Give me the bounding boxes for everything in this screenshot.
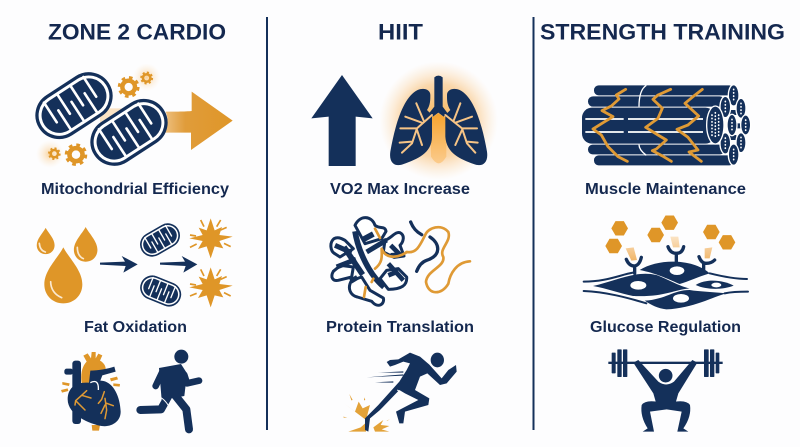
divider: right [532,17,534,430]
heading: Strength Training: STRENGTH TRAINING [540,20,785,44]
icon: heart [61,352,121,431]
icon: lungs [379,61,498,180]
icon: glucose regulation [584,215,748,309]
icon: muscle fibers [582,85,751,165]
label: Fat Oxidation: Fat Oxidation [84,319,187,336]
icon: VO2 max up arrow [311,75,373,166]
heading: HIIT: HIIT [378,20,424,44]
divider: left [266,17,268,430]
heading: Zone 2 Cardio: ZONE 2 CARDIO [48,20,226,44]
label: Mitochondrial Efficiency: Mitochondrial Efficiency [41,181,229,198]
icon: protein structure [331,218,470,305]
icon: runner [140,350,199,429]
label: Protein Translation: Protein Translation [326,319,474,336]
icon: weightlifter [608,349,723,432]
icon: mitochondrial efficiency [28,63,233,173]
icon: fat oxidation [37,218,233,309]
label: VO2 Max Increase: VO2 Max Increase [330,181,470,198]
label: Glucose Regulation: Glucose Regulation [590,319,741,336]
label: Muscle Maintenance: Muscle Maintenance [585,181,746,198]
icon: sprinter [343,353,457,432]
